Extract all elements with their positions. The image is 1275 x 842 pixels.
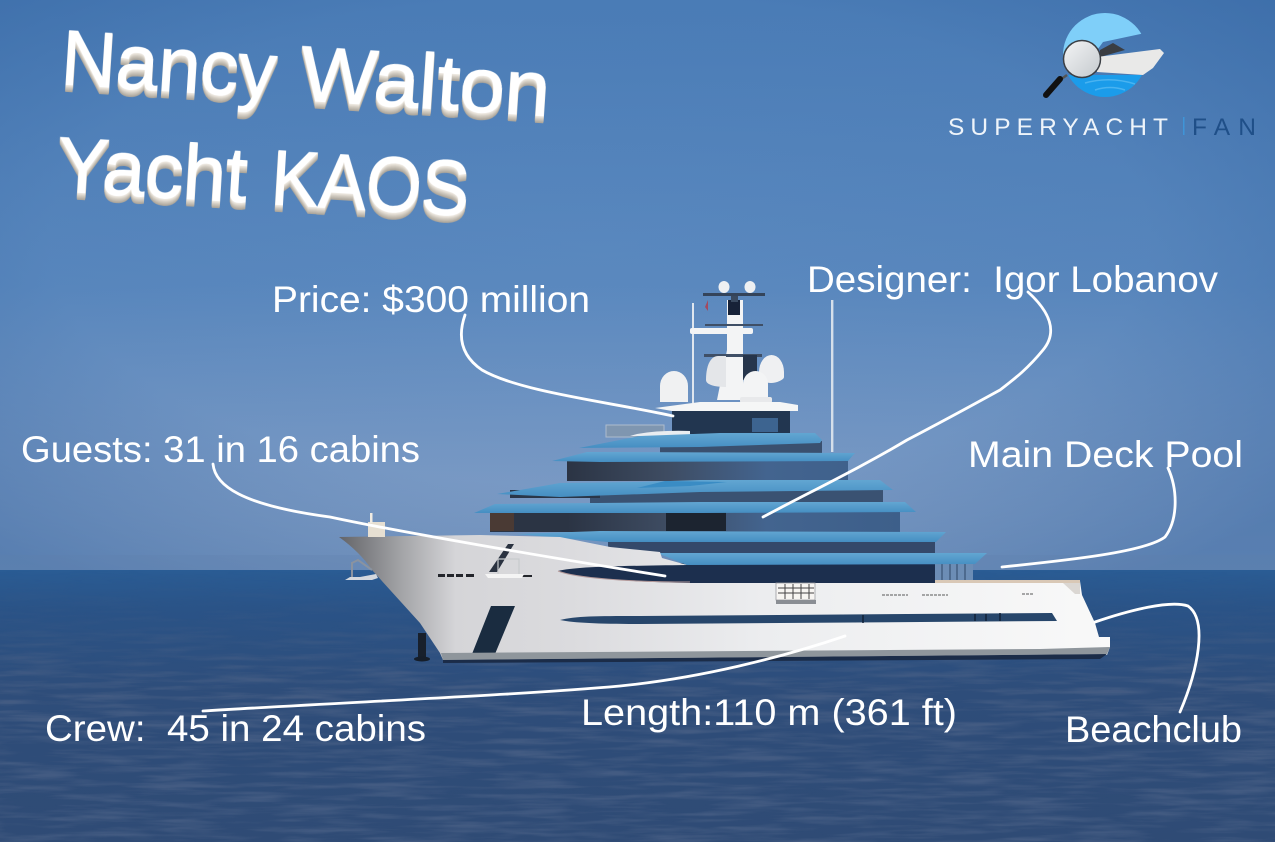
- background: sky: [0, 0, 1275, 572]
- title line: Nancy Walton: Walton: [298, 29, 553, 133]
- title line: Nancy Walton: Nancy: [59, 13, 279, 115]
- label: price: Price: $300 million: [272, 278, 590, 320]
- deck facets: [637, 481, 727, 488]
- label: designer: Designer: Igor Lobanov: [807, 258, 1218, 300]
- label: length: Length:110 m (361 ft): [581, 691, 957, 733]
- label: crew: [45, 636, 845, 749]
- background: sea: [0, 570, 1275, 842]
- main deck windows: [558, 565, 1057, 624]
- logo wordmark: FAN: [1192, 114, 1256, 141]
- glazed superstructure decks: [490, 441, 973, 583]
- label: beachclub: [1065, 604, 1242, 750]
- logo wordmark: SUPERYACHT: [948, 114, 1168, 141]
- title line: Yacht KAOS: Yacht: [55, 120, 250, 219]
- label: price: [272, 278, 673, 416]
- label: main deck pool: Main Deck Pool: [968, 433, 1243, 475]
- label: main deck pool: [968, 433, 1243, 567]
- label: crew: Crew: 45 in 24 cabins: [45, 707, 426, 749]
- gangway and stern rail: [776, 580, 1080, 604]
- title: [55, 13, 553, 233]
- title line: Yacht KAOS: [55, 120, 472, 233]
- mast and radar domes: [660, 281, 833, 452]
- superyacht KAOS: [339, 281, 1110, 663]
- logo icon: yacht in circle with magnifier: [1046, 10, 1164, 100]
- label: guests: Guests: 31 in 16 cabins: [21, 428, 420, 470]
- bridge deck: [606, 402, 798, 437]
- label: designer: [763, 258, 1218, 517]
- label: beachclub: Beachclub: [1065, 708, 1242, 750]
- label: guests: [21, 428, 665, 576]
- title line: Yacht KAOS: KAOS: [269, 133, 472, 233]
- blue deck overhangs: [474, 433, 987, 565]
- logo: Superyacht Fan: [948, 10, 1256, 141]
- title line: Nancy Walton: [59, 13, 553, 133]
- waterline: [441, 647, 1110, 660]
- bow flagstaff and details: [345, 513, 532, 662]
- hull: [339, 535, 1110, 660]
